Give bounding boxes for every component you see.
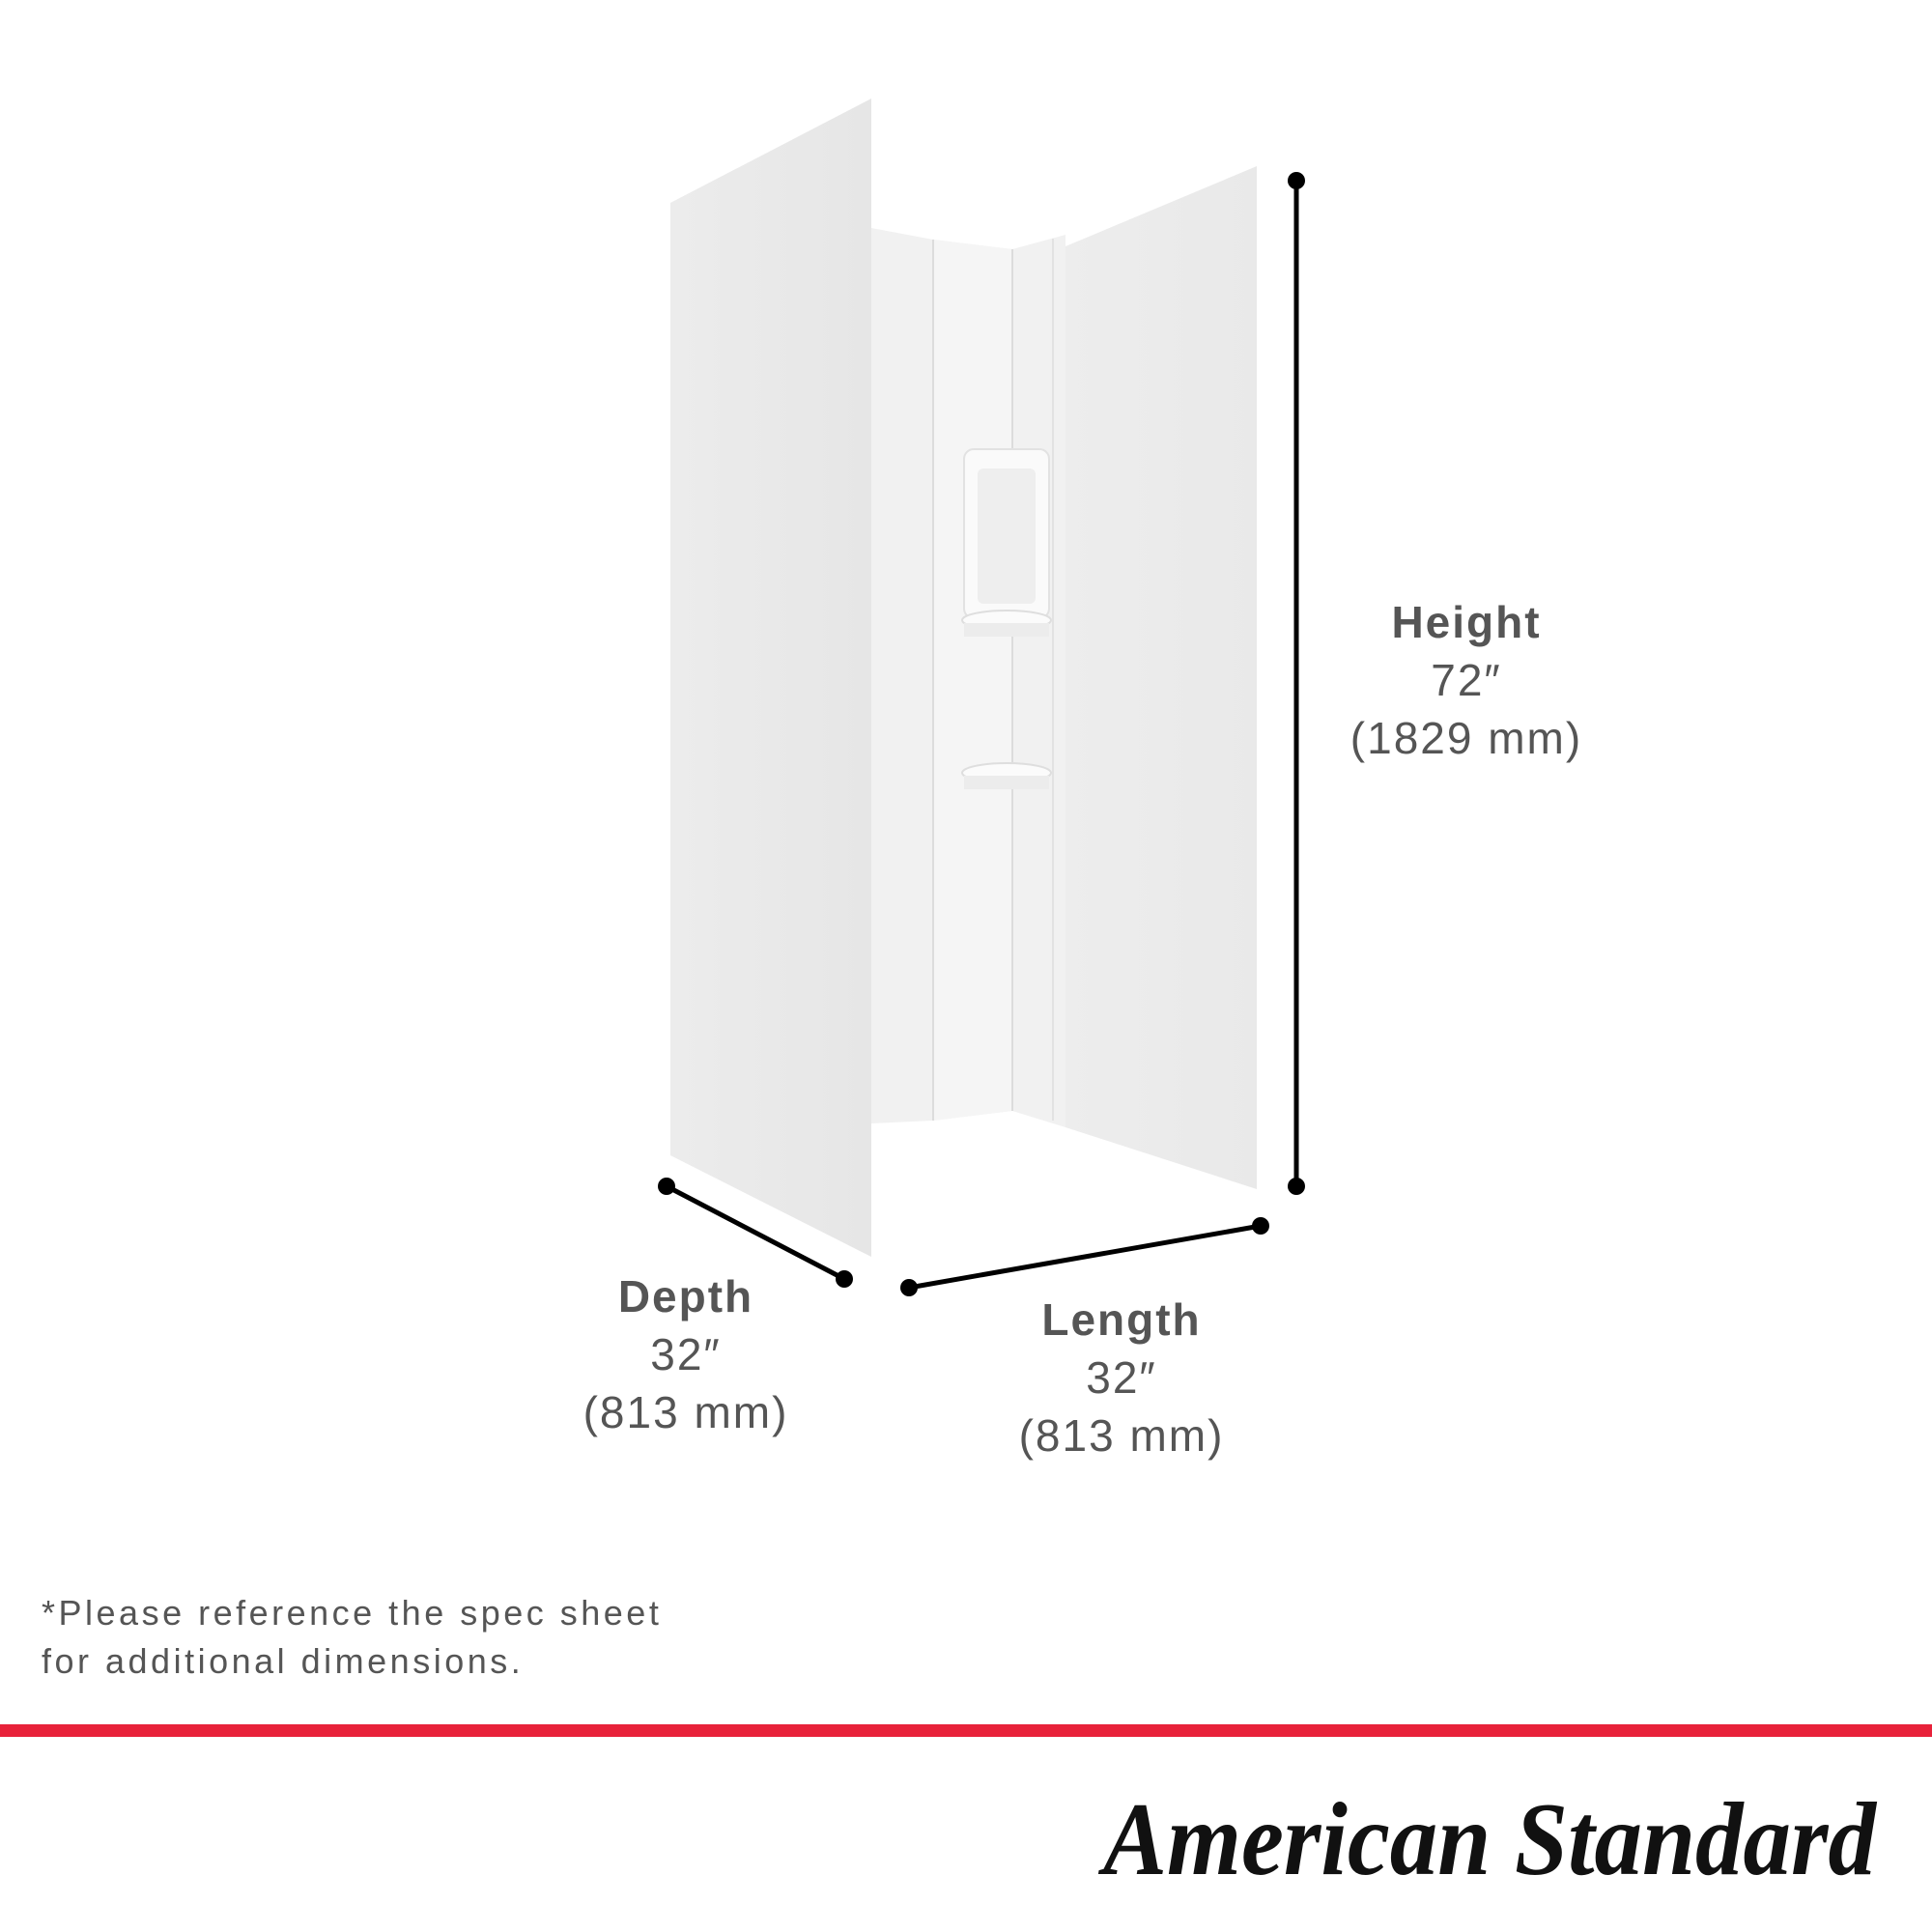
red divider bar: [0, 1724, 1932, 1737]
footnote: for additional dimensions.: [42, 1641, 524, 1681]
footnote: [42, 1593, 662, 1681]
depth dimension line: [658, 1178, 853, 1288]
right side panel: [1065, 166, 1257, 1189]
length dimension line: [900, 1217, 1269, 1296]
back walls: [871, 228, 1065, 1127]
label: depth: 32″: [650, 1329, 722, 1379]
footnote: *Please reference the spec sheet: [42, 1593, 662, 1633]
label: depth: [583, 1271, 788, 1437]
left side panel: [670, 99, 871, 1257]
height dimension line: [1288, 172, 1305, 1195]
label: length: (813 mm): [1019, 1410, 1224, 1461]
label: depth: (813 mm): [583, 1387, 788, 1437]
label: length: 32″: [1086, 1352, 1157, 1403]
label: depth: Depth: [618, 1271, 753, 1321]
label: height: (1829 mm): [1350, 713, 1582, 763]
label: length: Length: [1041, 1294, 1202, 1345]
label: height: Height: [1391, 597, 1542, 647]
label: height: [1350, 597, 1582, 763]
label: height: 72″: [1431, 655, 1502, 705]
label: length: [1019, 1294, 1224, 1461]
corner caddy shelves: [962, 449, 1051, 789]
